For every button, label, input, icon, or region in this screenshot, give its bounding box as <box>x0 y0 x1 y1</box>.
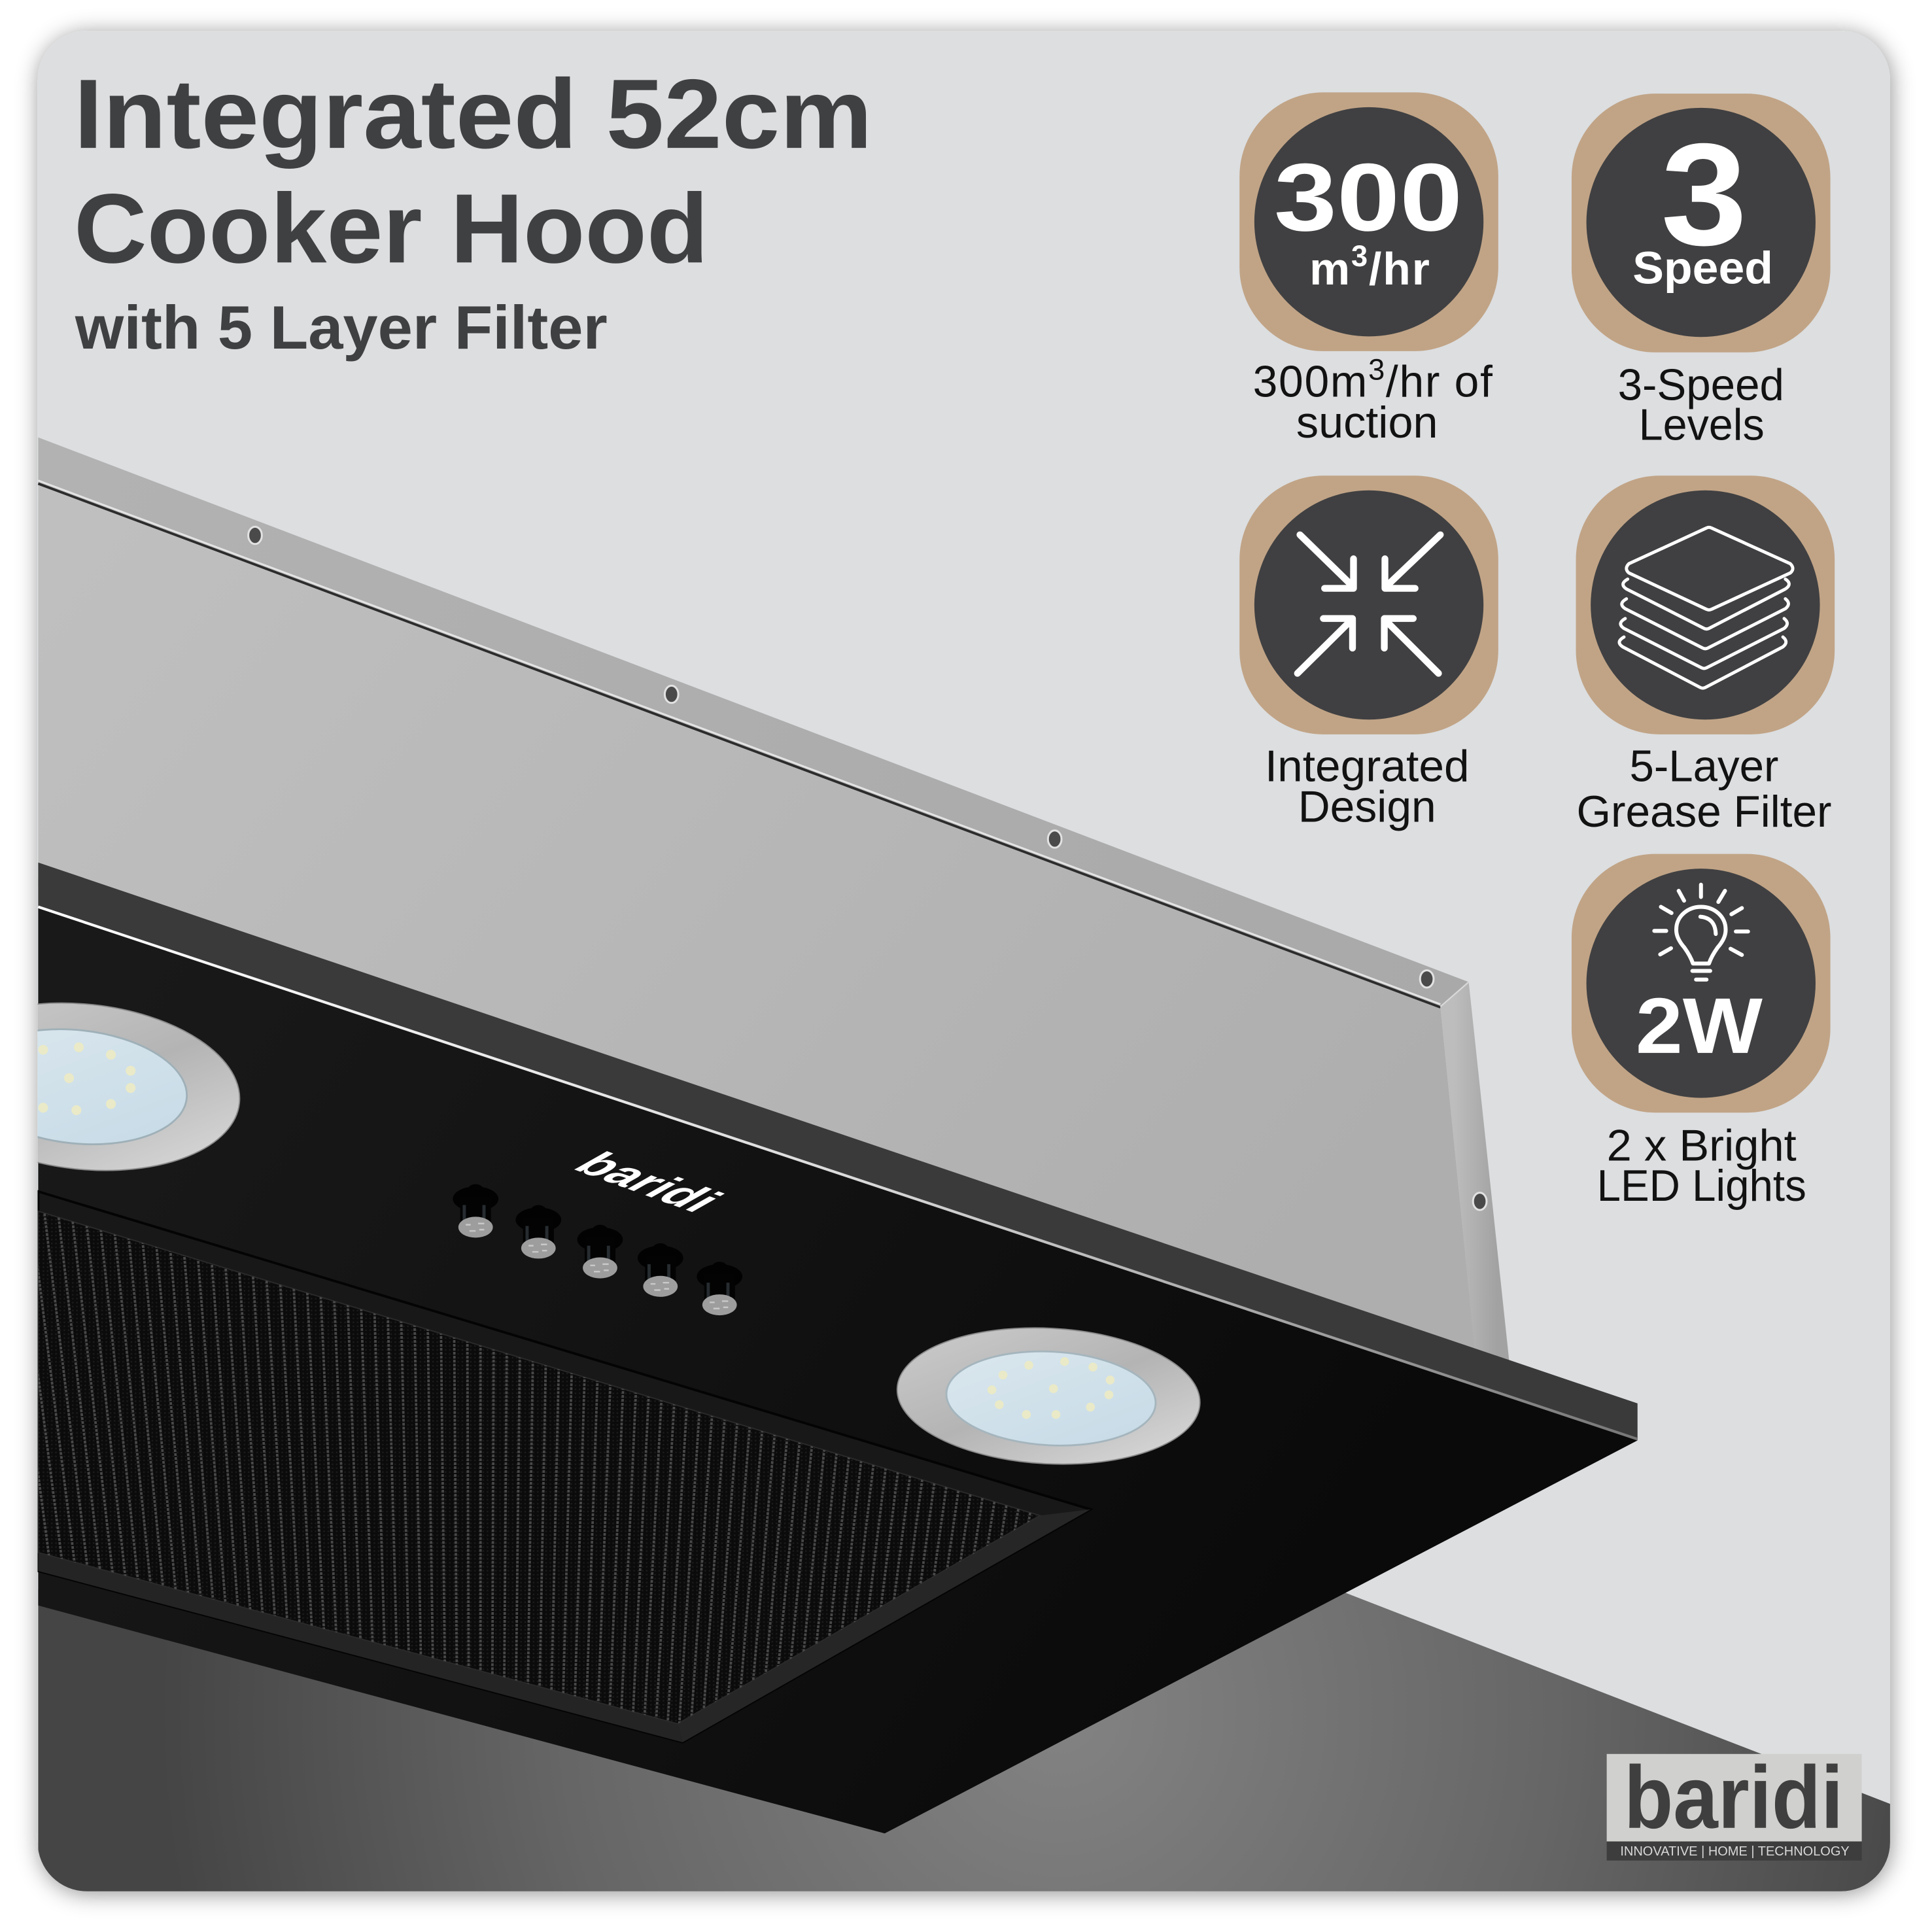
badge <box>1572 854 1831 1113</box>
feature: 300 m3/hr suction: suction <box>1296 398 1438 447</box>
title: Integrated 52cm <box>74 59 872 169</box>
brand logo: baridi <box>1624 1748 1843 1847</box>
badge <box>1239 92 1498 351</box>
hood black front panel <box>38 907 1638 1833</box>
icon: stacked layers <box>1619 527 1793 688</box>
caption: 5-Layer <box>1629 742 1778 791</box>
caption: Integrated <box>1265 742 1470 791</box>
feature: 2W LED lights <box>1572 854 1831 1211</box>
badge: Speed <box>1632 242 1773 293</box>
feature: 5 layer grease filter: Grease Filter <box>1576 787 1831 837</box>
right light <box>896 1327 1201 1465</box>
title: with 5 Layer Filter <box>75 293 608 362</box>
feature: 2W LED lights: LED Lights <box>1597 1162 1806 1211</box>
badge: 300 <box>1274 144 1462 251</box>
badge: 2W <box>1636 982 1763 1070</box>
icon: light bulb <box>1654 885 1748 980</box>
badge: m <box>1309 243 1351 294</box>
badge <box>1572 94 1831 353</box>
feature: integrated design: Design <box>1298 783 1436 832</box>
icon: inward arrows <box>1298 535 1440 674</box>
title <box>74 59 872 362</box>
control buttons <box>453 1184 742 1315</box>
badge <box>1576 475 1835 734</box>
grease filter <box>0 1171 1090 1750</box>
badge: /hr <box>1369 243 1431 294</box>
caption: 3-Speed <box>1618 360 1784 409</box>
caption: 3 <box>1368 353 1386 386</box>
badge: 3 <box>1351 239 1369 273</box>
badge: 3 <box>1661 114 1747 276</box>
brand logo: INNOVATIVE | HOME | TECHNOLOGY <box>1620 1844 1850 1859</box>
feature: 5 layer grease filter <box>1576 475 1835 837</box>
feature: 300 m3/hr suction <box>1239 92 1498 447</box>
floor shadow <box>38 1589 1890 1891</box>
hood top edge band <box>38 863 1638 1440</box>
feature: integrated design <box>1239 475 1498 832</box>
feature: 3 speed <box>1572 94 1831 450</box>
caption: 300m <box>1253 358 1368 407</box>
hood brand logo: baridi <box>562 1145 736 1218</box>
steel housing <box>38 438 1509 1380</box>
feature: 3 speed: Levels <box>1639 401 1765 450</box>
highlight line <box>38 907 1638 1439</box>
scene: floor and cooker hood <box>0 438 1890 1891</box>
title: Cooker Hood <box>74 173 708 283</box>
screws <box>249 526 1487 1210</box>
badge <box>1239 475 1498 734</box>
caption: /hr of <box>1386 358 1494 407</box>
left light <box>37 1002 241 1171</box>
caption: 2 x Bright <box>1607 1122 1797 1171</box>
